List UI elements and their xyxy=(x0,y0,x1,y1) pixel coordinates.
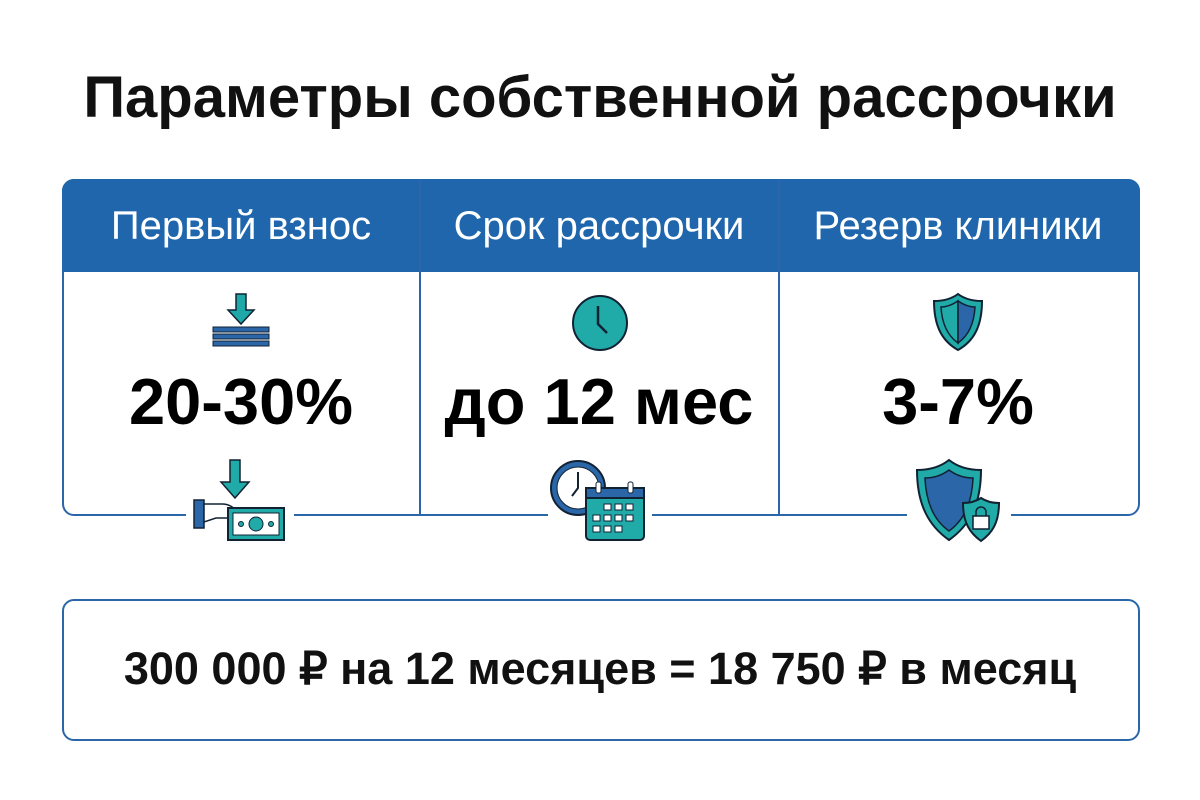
heading: term: Срок рассрочки xyxy=(454,204,744,248)
heading: reserve: Резерв клиники xyxy=(814,204,1102,248)
title: Параметры собственной рассрочки xyxy=(83,65,1117,130)
header bar xyxy=(62,179,1140,272)
icon: hand with money xyxy=(186,458,294,544)
value: first payment: 20-30% xyxy=(129,365,353,438)
icon: clock xyxy=(572,295,628,351)
icon: shield xyxy=(933,292,983,352)
heading: first payment: Первый взнос xyxy=(111,204,371,248)
icon: clock with calendar xyxy=(548,458,652,544)
panel: parameters card xyxy=(62,179,1140,516)
text: calculation: 300 000 ₽ на 12 месяцев = 18 750 ₽ в месяц xyxy=(124,643,1076,694)
icon: shield with lock xyxy=(907,458,1011,544)
icon: download arrow stack xyxy=(212,293,270,346)
value: reserve: 3-7% xyxy=(882,365,1034,438)
panel: example calculation xyxy=(62,599,1140,741)
value: term: до 12 мес xyxy=(445,365,753,438)
